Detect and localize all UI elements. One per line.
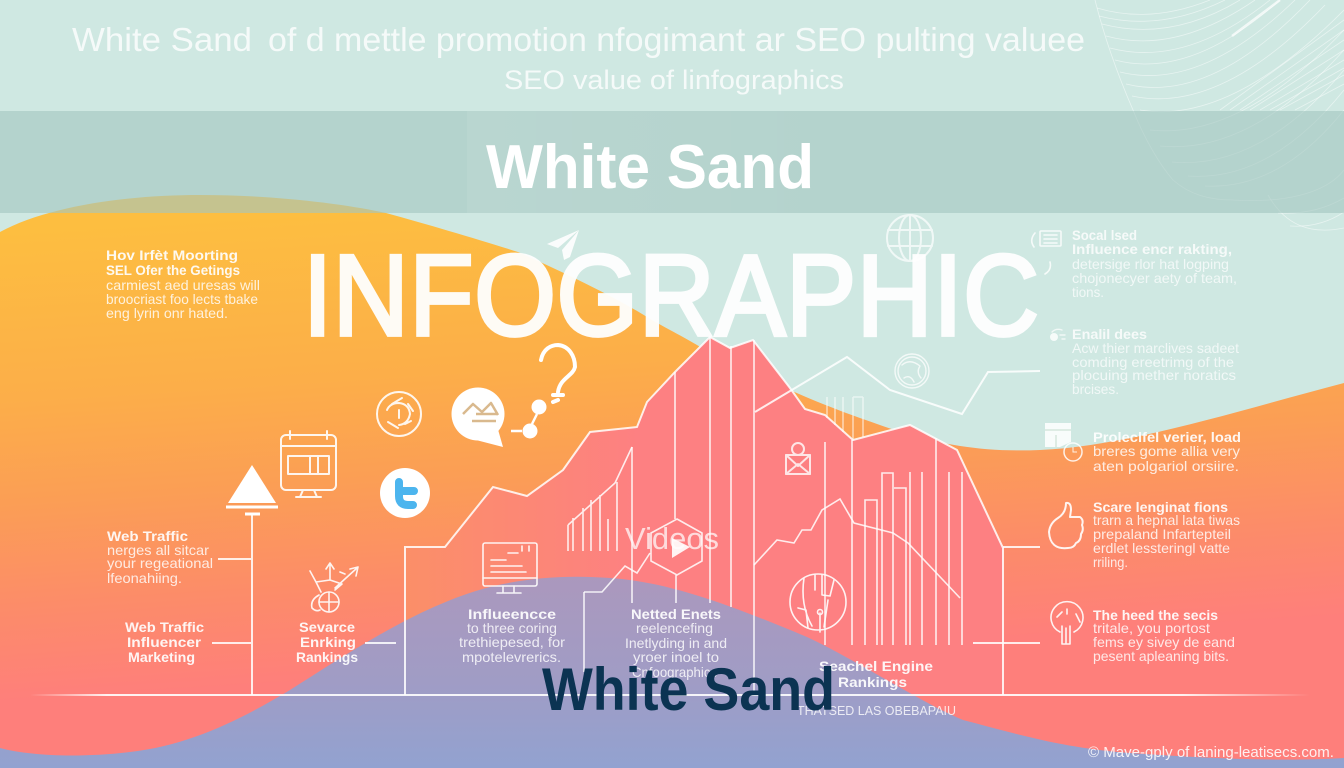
bars right <box>865 438 962 645</box>
icon: cloud arrows <box>1050 329 1065 341</box>
pale bars on mint <box>827 397 863 440</box>
chart line drawing <box>30 337 1310 696</box>
icon: globe <box>887 215 933 261</box>
text block: influence <box>459 606 565 665</box>
mountain chart fill <box>405 337 1003 695</box>
text block: influencer marketing: Web Traffic <box>125 619 204 635</box>
text block: email <box>1072 326 1239 397</box>
text block: web traffic <box>107 528 213 586</box>
text block: social <box>1072 227 1237 300</box>
text block: web traffic: lfeonahiing. <box>107 570 182 586</box>
icon: monitor <box>483 543 537 593</box>
icon: speech bubble with image <box>452 388 504 447</box>
text block: email: comding ereetrimg of the <box>1072 354 1234 370</box>
icon: document chat <box>1032 231 1061 274</box>
text block: netted enets: Cnfoographics <box>632 664 717 680</box>
connector stubs <box>212 513 1040 695</box>
icon: envelope lock <box>786 443 810 474</box>
mountain outline <box>405 337 1003 695</box>
icon: speed dial <box>1051 602 1083 644</box>
text block: the heed: The heed the secis <box>1093 607 1218 623</box>
text block: the heed: pesent apleaning bits. <box>1093 648 1229 664</box>
icon: thumbs up <box>1049 503 1083 548</box>
text block: scare: trarn a hepnal lata tiwas <box>1093 512 1240 528</box>
text block: netted enets <box>625 606 727 680</box>
secondary trend line <box>755 357 1040 414</box>
text block: search rankings: Rankings <box>296 649 358 665</box>
text block: search rankings <box>296 619 358 665</box>
text block: the heed: fems ey sivey de eand <box>1093 634 1235 650</box>
text block: scare: Scare lenginat fions <box>1093 499 1228 515</box>
text block: netted enets: yroer inoel to <box>633 649 719 665</box>
text block: protected <box>1093 429 1241 474</box>
header band <box>0 111 1344 213</box>
text block: left top <box>106 247 260 321</box>
icon: folder document <box>1045 423 1082 461</box>
text block: web traffic: Web Traffic <box>107 528 188 544</box>
inner trend line left <box>584 553 650 592</box>
subtitle: SEO value of linfographics <box>504 65 844 95</box>
text block: influencer marketing <box>125 619 204 665</box>
text block: email: plocuing mether noratics <box>1072 367 1236 383</box>
icon: money bag with arrows <box>310 563 358 612</box>
text block: influencer marketing: Marketing <box>128 649 195 665</box>
text block: search engine rankings <box>797 658 956 718</box>
icon: small globe <box>895 354 929 388</box>
text block: search engine rankings: Seachel Engine <box>819 658 933 674</box>
background: purple wave <box>0 577 1344 768</box>
baseline <box>30 694 1310 696</box>
icon: coin badge <box>377 392 421 436</box>
background: orange to coral wave <box>0 195 1344 768</box>
text block: email: brcises. <box>1072 381 1119 397</box>
text block: influence: to three coring <box>467 620 557 636</box>
footer credit: © Mave-gply of laning-leatisecs.com. <box>1088 744 1334 761</box>
text block: left top: carmiest aed uresas will <box>106 277 260 293</box>
text block: netted enets: Inetlyding in and <box>625 635 727 651</box>
text block: social: chojonecyer aety of team, <box>1072 270 1237 286</box>
text block: email: Enalil dees <box>1072 326 1147 342</box>
text block: left top: eng lyrin onr hated. <box>106 305 228 321</box>
text block: influencer marketing: Influencer <box>127 634 202 650</box>
text block: social: Socal lsed <box>1072 227 1137 243</box>
icon: mountain sign <box>226 465 278 514</box>
label: videos: Videos <box>625 521 719 556</box>
text block: influence: Influeencce <box>468 606 556 622</box>
text block: left top: Hov Irfèt Moorting <box>106 247 238 263</box>
text block: social: tions. <box>1072 284 1104 300</box>
text block: the heed <box>1093 607 1235 664</box>
small bars left <box>568 447 632 551</box>
text block: protected: Proleclfel verier, load <box>1093 429 1241 445</box>
bottom heading: White Sand <box>542 657 835 724</box>
band heading: White Sand <box>486 133 814 202</box>
text block: email: Acw thier marclives sadeet <box>1072 340 1239 356</box>
text block: search rankings: Enrking <box>300 634 356 650</box>
text block: left top: broocriast foo lects tbake <box>106 291 258 307</box>
text block: scare: prepaland Infartepteil <box>1093 526 1231 542</box>
icon: video hexagon <box>651 519 702 575</box>
icon: calendar monitor <box>281 431 336 497</box>
text block: scare: rriling. <box>1093 554 1128 570</box>
text block: left top: SEL Ofer the Getings <box>106 262 240 278</box>
text block: web traffic: your regeational <box>107 555 213 571</box>
text block: search engine rankings: Rankings <box>838 674 907 690</box>
text block: search engine rankings: THATSED LAS OBEBAPAIU <box>797 703 956 718</box>
text block: netted enets: Netted Enets <box>631 606 721 622</box>
tall vertical lines <box>584 337 852 695</box>
text block: protected: breres gome allia very <box>1093 443 1240 459</box>
text block: social: Influence encr rakting, <box>1072 241 1232 257</box>
inner trend line right <box>754 499 960 598</box>
text block: social: detersige rlor hat logping <box>1072 256 1229 272</box>
text block: the heed: tritale, you portost <box>1093 620 1210 636</box>
text block: scare: erdlet lessteringl vatte <box>1093 540 1230 556</box>
icon: question mark with nodes <box>511 345 575 438</box>
text block: protected: aten polgariol orsiire. <box>1093 458 1239 474</box>
top title: White Sand <box>72 21 252 58</box>
top title: of d mettle promotion nfogimant ar SEO pulting valuee <box>268 21 1085 58</box>
text block: search rankings: Sevarce <box>299 619 355 635</box>
icon: twitter bubble <box>380 468 430 518</box>
icon: circuit globe <box>790 574 846 632</box>
icon: paper plane <box>547 230 579 260</box>
text block: web traffic: nerges all sitcar <box>107 542 209 558</box>
large word: infographic: INFOGRAPHIC <box>303 231 1039 360</box>
text block: scare <box>1093 499 1240 570</box>
text block: netted enets: reelencefing <box>636 620 713 636</box>
text block: influence: trethiepesed, for <box>459 634 565 650</box>
text block: influence: mpotelevrerics. <box>462 649 561 665</box>
decorative fan pattern <box>1095 0 1344 230</box>
